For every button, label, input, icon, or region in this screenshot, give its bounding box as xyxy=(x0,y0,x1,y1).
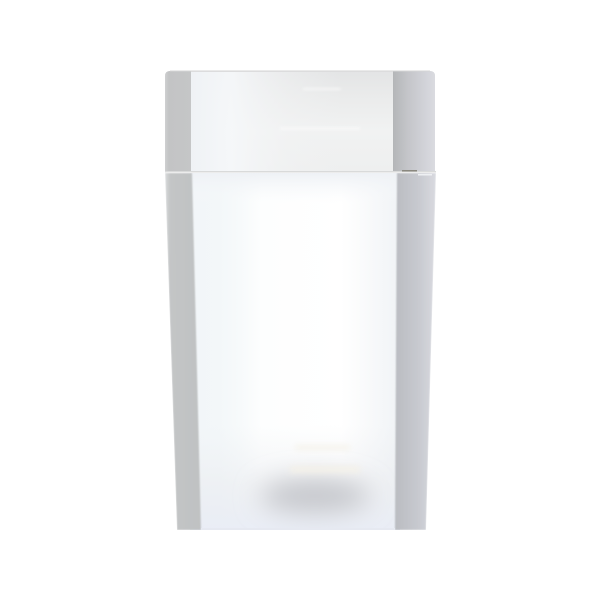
warm highlight bands xyxy=(298,445,347,450)
left body edge band xyxy=(165,173,201,530)
body frosted fill xyxy=(193,191,396,466)
lid xyxy=(165,70,435,171)
right body edge band xyxy=(395,173,436,530)
lid top edge xyxy=(170,70,430,72)
inner contents shadow xyxy=(260,479,370,513)
lid left sheen xyxy=(191,72,393,171)
seam between lid and body xyxy=(165,170,436,176)
body lower haze xyxy=(202,470,394,528)
illustration: frosted translucent container xyxy=(165,70,436,530)
lid frosted fill xyxy=(165,71,435,171)
lid right edge band xyxy=(393,71,435,171)
bottom edge xyxy=(201,528,395,530)
lid left edge band xyxy=(165,71,191,171)
body top shading xyxy=(236,173,377,184)
lid highlights xyxy=(280,88,360,130)
container body xyxy=(165,170,436,535)
